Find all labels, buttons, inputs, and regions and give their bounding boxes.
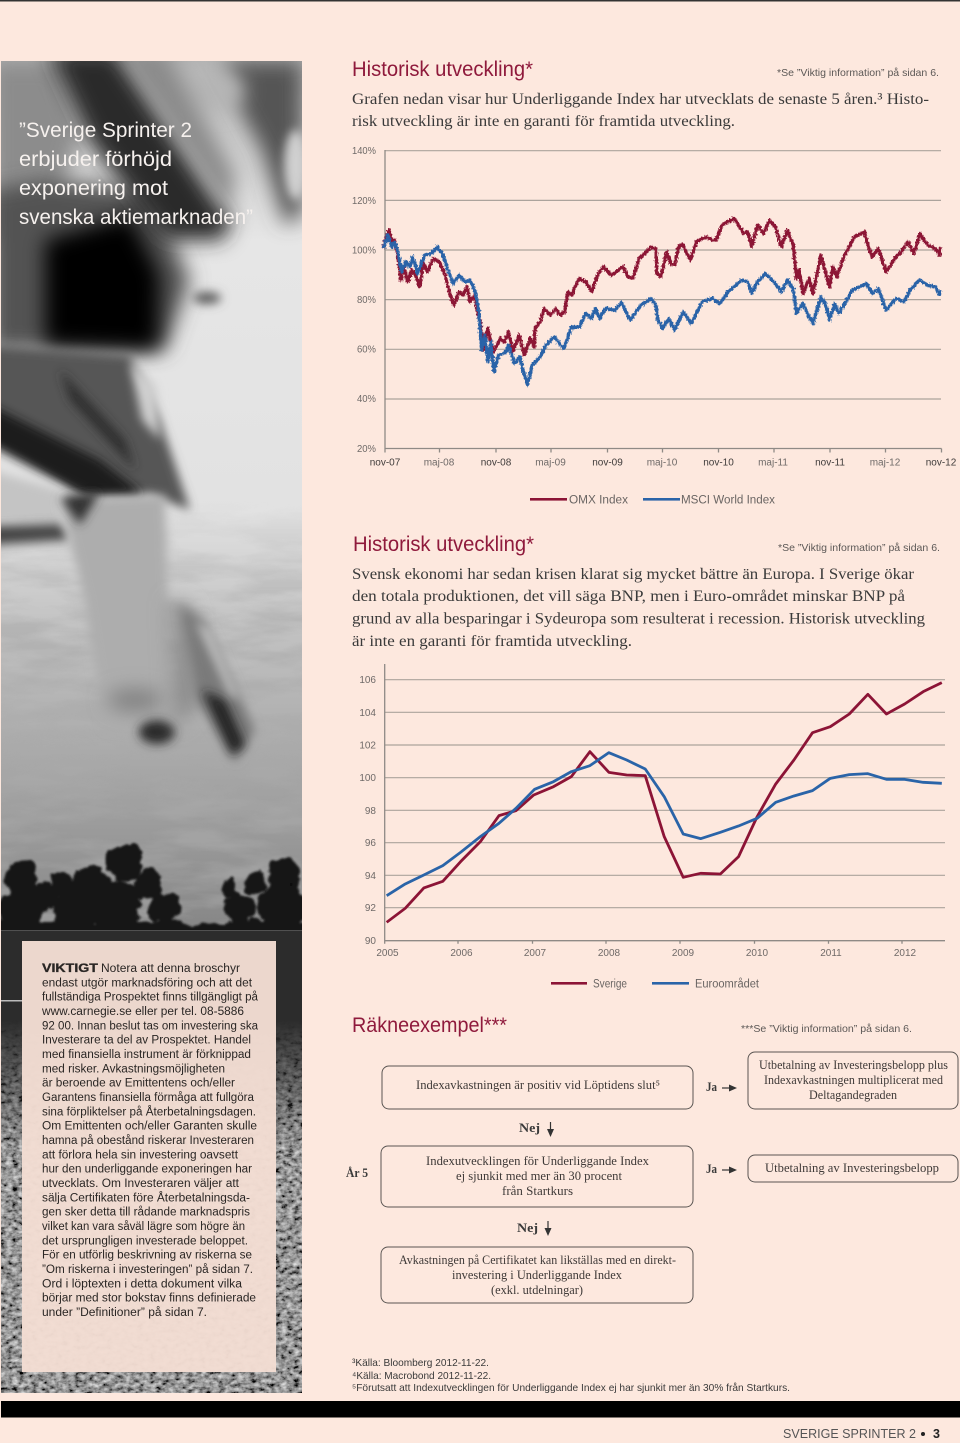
panel: viktigt risk notice: www.carnegie.se eller per tel. 08-5886 bbox=[41, 1006, 244, 1018]
line chart: Sverige vs Euroområdet GDP bbox=[359, 664, 945, 959]
text block: intro chart 2: Svensk ekonomi har sedan krisen klarat sig mycket bättre än Europa. I Sverige ökar bbox=[352, 566, 915, 583]
line chart: Sverige vs Euroområdet GDP: 2008 bbox=[598, 948, 621, 959]
label and arrow: ja 1 bbox=[706, 1079, 737, 1094]
series: Sverige bbox=[387, 683, 942, 922]
label and arrow: nej 1 bbox=[519, 1120, 554, 1137]
line chart: Sverige vs Euroområdet GDP: 2006 bbox=[450, 948, 473, 959]
panel: viktigt risk notice: med finansiella instrument är förknippad bbox=[42, 1049, 251, 1061]
line chart: Sverige vs Euroområdet GDP: 2012 bbox=[894, 948, 917, 959]
panel: viktigt risk notice: Om Emittenten och/eller Garanten skulle bbox=[42, 1121, 257, 1133]
panel: viktigt risk notice: sina förpliktelser på Återbetalningsdagen. bbox=[42, 1105, 256, 1118]
panel: viktigt risk notice: ”Om riskerna i investeringen” på sidan 7. bbox=[42, 1264, 253, 1276]
line chart: OMX Index vs MSCI World Index: nov-10 bbox=[703, 458, 734, 468]
heading: historisk utveckling 2: Historisk utveckling* bbox=[353, 533, 534, 556]
flow box: direct investment: investering i Underliggande Index bbox=[452, 1268, 623, 1282]
text block: intro chart 1: risk utveckling är inte en garanti för framtida utveckling. bbox=[352, 113, 735, 130]
flow box: positive index: Indexavkastningen är positiv vid Löptidens slut⁵ bbox=[416, 1078, 660, 1092]
line chart: Sverige vs Euroområdet GDP: 98 bbox=[365, 806, 376, 817]
flow box: index decline test: från Startkurs bbox=[502, 1184, 573, 1198]
heading: historisk utveckling 1: Historisk utveckling* bbox=[352, 58, 533, 81]
line chart: OMX Index vs MSCI World Index: 140% bbox=[352, 146, 376, 157]
line chart: OMX Index vs MSCI World Index bbox=[352, 146, 957, 468]
line chart: OMX Index vs MSCI World Index: maj-12 bbox=[870, 458, 901, 468]
line chart: OMX Index vs MSCI World Index: maj-10 bbox=[647, 458, 678, 468]
panel: viktigt risk notice: gen sker detta till rådande marknadspris bbox=[42, 1207, 250, 1219]
flow box: payout bbox=[748, 1155, 958, 1182]
series: MSCI World Index bbox=[383, 235, 940, 385]
line chart: OMX Index vs MSCI World Index: nov-12 bbox=[926, 458, 957, 468]
line chart: Sverige vs Euroområdet GDP: 96 bbox=[365, 838, 376, 849]
panel: viktigt risk notice: utvecklats. Om Investeraren väljer att bbox=[42, 1178, 240, 1190]
text block: intro chart 2: den totala produktionen, det vill säga BNP, men i Euro-området minskar BNP på bbox=[352, 588, 905, 605]
panel: viktigt risk notice: är beroende av Emittentens och/eller bbox=[42, 1078, 235, 1090]
legend: chart 1 bbox=[530, 494, 775, 506]
footer: page label: 3 bbox=[933, 1427, 940, 1441]
label and arrow: nej 1: Nej bbox=[519, 1120, 540, 1135]
panel: viktigt risk notice: sälja Certifikaten före Återbetalningsda- bbox=[42, 1191, 250, 1204]
line chart: Sverige vs Euroområdet GDP: 102 bbox=[359, 740, 376, 752]
line chart: Sverige vs Euroområdet GDP: 2007 bbox=[524, 948, 547, 959]
quote over photo: erbjuder förhöjd bbox=[19, 148, 172, 171]
heading: historisk utveckling 2: *Se ”Viktig information” på sidan 6. bbox=[778, 542, 940, 554]
footnotes: ⁵Förutsatt att Indexutvecklingen för Underliggande Index ej har sjunkit mer än 30% från Startkurs. bbox=[352, 1382, 790, 1394]
text block: intro chart 2 bbox=[352, 566, 925, 650]
line chart: Sverige vs Euroområdet GDP: 90 bbox=[365, 936, 376, 947]
flow box: positive index bbox=[382, 1066, 693, 1109]
text block: intro chart 2: är inte en garanti för framtida utveckling. bbox=[352, 633, 632, 650]
quote over photo: svenska aktiemarknaden” bbox=[19, 206, 253, 229]
panel: viktigt risk notice: att förlora hela sin investering oavsett bbox=[42, 1149, 239, 1161]
flow box: direct investment: (exkl. utdelningar) bbox=[491, 1283, 583, 1297]
heading: historisk utveckling 1: *Se ”Viktig information” på sidan 6. bbox=[777, 67, 939, 79]
quote over photo: exponering mot bbox=[19, 177, 168, 200]
line chart: OMX Index vs MSCI World Index: maj-08 bbox=[424, 458, 455, 468]
text block: intro chart 1 bbox=[352, 91, 929, 130]
heading: historisk utveckling 2 bbox=[353, 533, 940, 556]
line chart: Sverige vs Euroområdet GDP: 2009 bbox=[672, 948, 695, 959]
flow box: direct investment bbox=[381, 1247, 693, 1303]
line chart: OMX Index vs MSCI World Index: nov-11 bbox=[815, 458, 845, 468]
quote over photo: ”Sverige Sprinter 2 bbox=[19, 119, 192, 142]
panel: viktigt risk notice: Investerare ta del av Prospektet. Handel bbox=[42, 1035, 251, 1047]
panel: viktigt risk notice: Notera att denna broschyr bbox=[101, 963, 240, 975]
line chart: OMX Index vs MSCI World Index: 80% bbox=[357, 295, 376, 306]
line chart: OMX Index vs MSCI World Index: nov-09 bbox=[592, 458, 623, 468]
panel: viktigt risk notice: det ursprungligen investerade beloppet. bbox=[42, 1235, 248, 1247]
panel: viktigt risk notice: Garantens finansiella förmåga att fullgöra bbox=[42, 1092, 255, 1104]
line chart: OMX Index vs MSCI World Index: nov-08 bbox=[481, 458, 512, 468]
legend: chart 1: MSCI World Index bbox=[681, 494, 775, 506]
label and arrow: nej 2 bbox=[517, 1220, 552, 1236]
text block: intro chart 1: Grafen nedan visar hur Underliggande Index har utvecklats de senaste 5 åren.³ Histo- bbox=[352, 91, 929, 108]
line chart: OMX Index vs MSCI World Index: maj-09 bbox=[535, 458, 566, 468]
series: OMX Index bbox=[383, 218, 940, 355]
line chart: Sverige vs Euroområdet GDP: 94 bbox=[365, 871, 376, 882]
label and arrow: nej 2: Nej bbox=[517, 1220, 538, 1235]
label: år 5: År 5 bbox=[346, 1165, 368, 1180]
footnotes: ³Källa: Bloomberg 2012-11-22. bbox=[352, 1357, 489, 1369]
line chart: Sverige vs Euroområdet GDP: 104 bbox=[359, 708, 376, 719]
line chart: Sverige vs Euroområdet GDP: 100 bbox=[359, 773, 376, 784]
quote over photo bbox=[19, 119, 253, 229]
panel: viktigt risk notice: endast utgör marknadsföring och att det bbox=[42, 977, 253, 989]
panel: viktigt risk notice: hamna på obestånd riskerar Investeraren bbox=[42, 1135, 254, 1147]
panel: viktigt risk notice: För en utförlig beskrivning av riskerna se bbox=[42, 1250, 252, 1262]
flow box: payout plus return: Utbetalning av Investeringsbelopp plus bbox=[759, 1058, 948, 1072]
heading: historisk utveckling 1 bbox=[352, 58, 939, 81]
heading: räkneexempel: Räkneexempel*** bbox=[352, 1014, 507, 1037]
ground and running track bbox=[1, 932, 302, 1148]
line chart: OMX Index vs MSCI World Index: 40% bbox=[357, 394, 376, 405]
panel: viktigt risk notice: vilket kan vara såväl lägre som högre än bbox=[42, 1221, 245, 1233]
line chart: Sverige vs Euroområdet GDP: 106 bbox=[359, 675, 376, 686]
line chart: OMX Index vs MSCI World Index: 20% bbox=[357, 444, 376, 455]
footnotes bbox=[352, 1357, 790, 1394]
panel: viktigt risk notice: börjar med stor bokstav finns definierade bbox=[42, 1293, 256, 1305]
series: Euroområdet bbox=[387, 753, 942, 896]
line chart: OMX Index vs MSCI World Index: 100% bbox=[352, 246, 376, 256]
heading: räkneexempel: ***Se ”Viktig information” på sidan 6. bbox=[741, 1023, 912, 1035]
panel: viktigt risk notice: VIKTIGT bbox=[42, 963, 98, 975]
flow box: payout plus return: Deltagandegraden bbox=[809, 1088, 898, 1102]
flow box: payout: Utbetalning av Investeringsbelopp bbox=[765, 1161, 939, 1175]
photo: blurred sprinter against cloudy sky bbox=[0, 50, 320, 1393]
legend: chart 2: Euroområdet bbox=[695, 978, 760, 990]
label and arrow: ja 2: Ja bbox=[706, 1161, 717, 1176]
tree line silhouette bbox=[1, 842, 302, 932]
panel: viktigt risk notice: hur den underliggande exponeringen har bbox=[42, 1164, 252, 1176]
footnotes: ⁴Källa: Macrobond 2012-11-22. bbox=[352, 1370, 491, 1382]
panel: viktigt risk notice: under ”Definitioner” på sidan 7. bbox=[42, 1307, 207, 1319]
panel: viktigt risk notice: Ord i löptexten i detta dokument vilka bbox=[42, 1278, 243, 1290]
line chart: Sverige vs Euroområdet GDP: 2005 bbox=[376, 948, 399, 959]
panel: viktigt risk notice: 92 00. Innan beslut tas om investering ska bbox=[42, 1020, 259, 1032]
legend: chart 2: Sverige bbox=[593, 978, 627, 990]
line chart: OMX Index vs MSCI World Index: 120% bbox=[352, 196, 376, 207]
panel: viktigt risk notice: med risker. Avkastningsmöjligheten bbox=[42, 1063, 225, 1075]
flow box: direct investment: Avkastningen på Certifikatet kan likställas med en direkt- bbox=[399, 1253, 676, 1267]
legend: chart 1: OMX Index bbox=[569, 494, 628, 506]
line chart: OMX Index vs MSCI World Index: 60% bbox=[357, 344, 376, 356]
line chart: Sverige vs Euroområdet GDP: 2011 bbox=[820, 948, 842, 959]
flow box: index decline test bbox=[381, 1146, 693, 1207]
flow box: payout plus return bbox=[748, 1052, 958, 1109]
line chart: OMX Index vs MSCI World Index: nov-07 bbox=[370, 458, 401, 468]
line chart: Sverige vs Euroområdet GDP: 92 bbox=[365, 903, 376, 914]
legend: chart 2 bbox=[551, 978, 760, 990]
label and arrow: ja 1: Ja bbox=[706, 1079, 717, 1094]
footer: page label: SVERIGE SPRINTER 2 bbox=[783, 1427, 916, 1441]
panel: viktigt risk notice bbox=[22, 941, 276, 1372]
line chart: OMX Index vs MSCI World Index: maj-11 bbox=[758, 458, 788, 468]
line chart: Sverige vs Euroområdet GDP: 2010 bbox=[746, 948, 769, 959]
text block: intro chart 2: grund av alla besparingar i Sydeuropa som resulterat i recession. Historisk utveckling bbox=[352, 610, 925, 628]
flow box: payout plus return: Indexavkastningen multiplicerat med bbox=[764, 1073, 944, 1087]
flowchart: payout scenarios bbox=[346, 1052, 958, 1303]
heading: räkneexempel bbox=[352, 1014, 912, 1037]
flow box: index decline test: ej sjunkit med mer än 30 procent bbox=[456, 1169, 623, 1183]
footer bar bbox=[1, 1401, 960, 1418]
panel: viktigt risk notice: fullständiga Prospektet finns tillgängligt på bbox=[42, 992, 259, 1004]
flow box: index decline test: Indexutvecklingen för Underliggande Index bbox=[426, 1154, 650, 1168]
label and arrow: ja 2 bbox=[706, 1161, 737, 1176]
